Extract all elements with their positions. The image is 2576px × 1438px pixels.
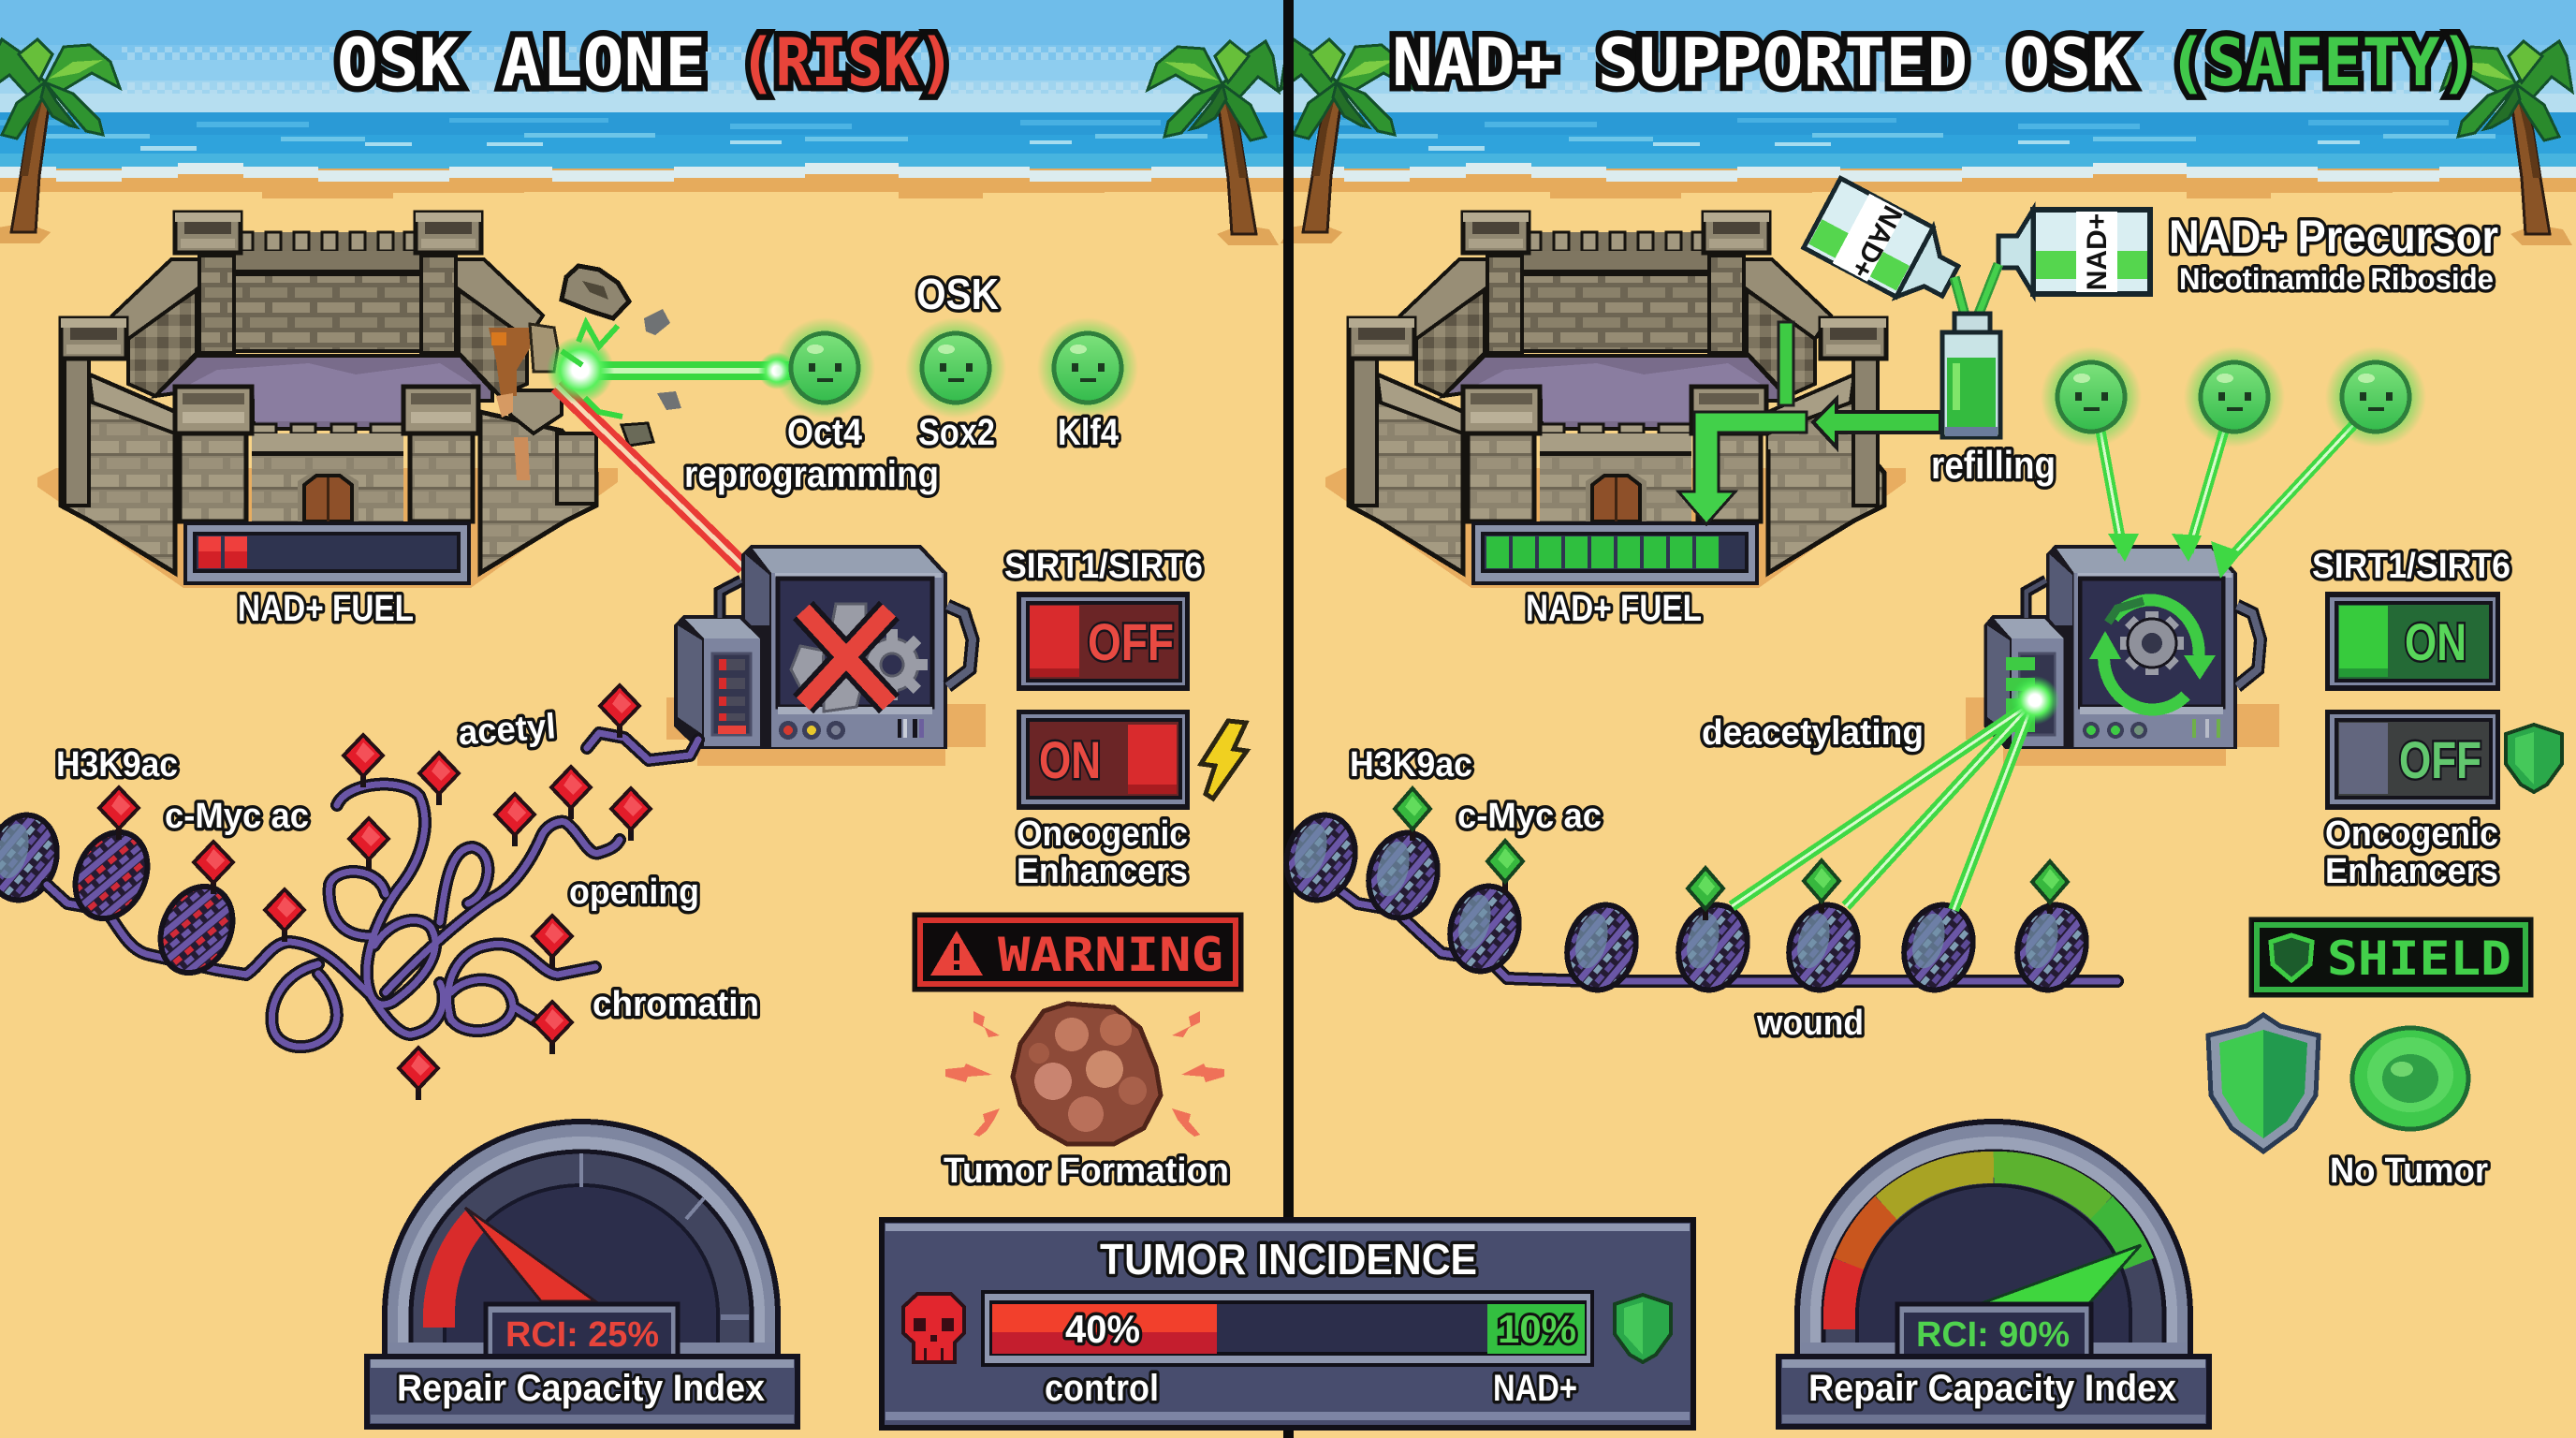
label: acetyl: acetyl (457, 707, 557, 753)
palm tree: left panel left (0, 39, 120, 243)
bar: control 40% (992, 1304, 1217, 1354)
bottle: horizontal NAD+: NAD+ (2082, 213, 2113, 290)
title: OSK alone risk: (RISK) (739, 24, 955, 101)
beams: slimes to machine (2100, 423, 2355, 579)
label: deacetylating: deacetylating (1702, 713, 1924, 753)
red LEDs (718, 659, 746, 734)
fuel bar: low (183, 521, 471, 585)
nucleosome coil (0, 807, 66, 908)
gear (2120, 611, 2184, 675)
label: no tumor: No Tumor (2330, 1152, 2488, 1191)
bottle: horizontal NAD+ (1998, 210, 2150, 294)
tumor sparks (945, 1011, 1224, 1137)
icon: healthy cell (2352, 1028, 2468, 1129)
icon: warning triangle (930, 931, 983, 976)
dials and vents (779, 719, 924, 740)
title: OSK alone risk: OSK ALONE (337, 24, 706, 101)
chromatin rail (1339, 889, 2117, 981)
gauge fill arc (1839, 1167, 2139, 1329)
label: oncogenic enhancers: Enhancers (1017, 852, 1188, 891)
icon: small shield (2506, 725, 2562, 792)
label: refilling: refilling (1931, 443, 2056, 487)
intact right wall (1691, 374, 1854, 449)
title: NAD+ supported OSK safety (1392, 24, 2479, 101)
switch: oncogenic off (2325, 710, 2500, 810)
icon: lightning bolt (1201, 721, 1247, 799)
RCI readout (1897, 1304, 2091, 1358)
label: c-Myc ac right: c-Myc ac (1457, 797, 1602, 836)
label: SIRT1/SIRT6: SIRT1/SIRT6 (1004, 547, 1203, 586)
label: oncogenic enhancers: Oncogenic (1017, 814, 1188, 854)
RCI readout (486, 1304, 678, 1358)
icon: shield (2271, 935, 2312, 980)
switch: SIRT on (2325, 592, 2500, 691)
switch: SIRT on: ON (2405, 612, 2466, 671)
label: tumor formation: Tumor Formation (944, 1152, 1229, 1191)
label: NAD+ precursor: NAD+ Precursor (2169, 211, 2498, 263)
warning sign: WARNING (998, 928, 1223, 982)
label: control: control (1045, 1368, 1159, 1409)
title: NAD+ supported OSK safety: NAD+ SUPPORTED OSK (1392, 24, 2132, 101)
gauge: RCI 25% (367, 1122, 798, 1427)
switch: SIRT off: OFF (1088, 612, 1174, 671)
warning sign (914, 914, 1242, 990)
label: H3K9ac: H3K9ac (56, 745, 178, 785)
label: SIRT1/SIRT6 right: SIRT1/SIRT6 (2312, 547, 2510, 586)
fuel bar: nearly full (1471, 521, 1759, 585)
panel: OSK alone (risk) (0, 24, 1247, 1427)
RCI readout: RCI: 25% (505, 1315, 659, 1355)
label: NAD+ fuel: NAD+ FUEL (238, 588, 414, 629)
icon: shield (1615, 1295, 1671, 1362)
panel: NAD+ supported OSK (safety) (1277, 24, 2562, 1427)
label: Klf4: Klf4 (1058, 412, 1120, 453)
chromatin: compact and deacetylated (1277, 788, 2117, 998)
palm tree: right panel right (2441, 41, 2572, 245)
label: NAD+: NAD+ (1493, 1368, 1577, 1409)
castle with full fuel (1325, 213, 1906, 588)
machine: working repair machine (1966, 545, 2279, 766)
green refill arrows (1678, 322, 1940, 524)
green LEDs (2006, 657, 2035, 732)
RCI readout: RCI: 90% (1916, 1315, 2070, 1355)
switch: SIRT off (1017, 592, 1190, 691)
label: reprogramming: reprogramming (684, 454, 939, 495)
OSK slimes (2041, 346, 2426, 448)
label: oncogenic enhancers right: Enhancers (2325, 852, 2498, 891)
gauge: RCI 25%: Repair Capacity Index (397, 1368, 765, 1409)
green deacetylated marks (1395, 788, 2068, 920)
gauge needle (465, 1208, 595, 1301)
damage on the castle wall (489, 324, 596, 504)
gauge ticks (579, 1153, 749, 1320)
bottle: tilted NAD+: NAD+ (1845, 200, 1908, 283)
comparison bar (981, 1290, 1594, 1367)
palm tree: left panel right (1148, 41, 1279, 245)
label: chromatin: chromatin (593, 985, 759, 1024)
gauge fill arc (423, 1208, 487, 1328)
title: OSK alone risk (337, 24, 955, 101)
red nucleosomes (62, 820, 246, 985)
machine: broken repair machine (666, 545, 986, 766)
bottle: tilted NAD+ (1804, 178, 1969, 315)
switch: oncogenic on (1017, 710, 1190, 810)
label: Sox2: Sox2 (918, 412, 995, 453)
slime: Oct4 (774, 317, 875, 418)
gauge label plate (367, 1357, 798, 1427)
background: right beach scene (1288, 0, 2576, 1438)
gauge: RCI 90% (1778, 1122, 2209, 1427)
gauge label plate (1778, 1357, 2209, 1427)
palm tree: right panel left (1281, 39, 1412, 243)
background: left beach scene (0, 0, 1288, 1438)
gauge needle (1982, 1245, 2141, 1303)
icon: tumor mass (945, 1004, 1224, 1144)
NAD+ streams (1954, 264, 1998, 318)
circular green arrows (2089, 600, 2216, 710)
green reprogramming beam (547, 323, 796, 417)
bar: NAD+ 10%: 10% (1498, 1307, 1576, 1351)
panel: tumor incidence (882, 1220, 1693, 1428)
center divider (1283, 0, 1294, 1438)
OSK factor group (774, 270, 1138, 453)
switch: oncogenic off: OFF (2399, 730, 2481, 789)
deacetylating beams (1732, 676, 2059, 910)
vial: refill (1942, 314, 2000, 437)
tangled chromatin strand (47, 733, 698, 1047)
icon: large shield (2208, 1015, 2319, 1152)
label: wound: wound (1756, 1004, 1864, 1043)
flying rubble (562, 266, 681, 446)
label: oncogenic enhancers right (2325, 814, 2498, 891)
title: NAD+ supported OSK safety: (SAFETY) (2168, 24, 2479, 101)
label: oncogenic enhancers right: Oncogenic (2325, 814, 2498, 854)
slime: Klf4 (1037, 317, 1138, 418)
broken gears (791, 604, 928, 712)
label: oncogenic enhancers (1017, 814, 1188, 891)
label: OSK: OSK (916, 270, 999, 318)
castle with depleted fuel (37, 213, 681, 588)
shield sign (2250, 918, 2532, 996)
dials and vents (2083, 719, 2220, 739)
label: Oct4: Oct4 (787, 412, 863, 453)
nucleosomes (1277, 807, 2096, 998)
heading: TUMOR INCIDENCE (1100, 1235, 1477, 1284)
red beam: machine disrupted (557, 386, 744, 567)
bar: control 40%: 40% (1065, 1307, 1140, 1351)
label: NAD+ precursor (2169, 211, 2498, 296)
label: opening: opening (569, 873, 699, 912)
label: c-Myc ac: c-Myc ac (165, 797, 309, 836)
red X (803, 610, 889, 704)
switch: oncogenic on: ON (1039, 730, 1101, 789)
shield sign: SHIELD (2327, 932, 2511, 986)
label: NAD+ fuel right: NAD+ FUEL (1526, 588, 1702, 629)
label: H3K9ac right: H3K9ac (1350, 745, 1472, 785)
slime: Sox2 (905, 317, 1006, 418)
chromatin: open and acetylated (0, 685, 698, 1100)
intact right tower (1821, 318, 1886, 506)
red acetyl marks (99, 685, 651, 1100)
gauge: RCI 90%: Repair Capacity Index (1808, 1368, 2176, 1409)
label: NAD+ precursor: Nicotinamide Riboside (2179, 262, 2494, 296)
icon: skull (903, 1294, 964, 1362)
